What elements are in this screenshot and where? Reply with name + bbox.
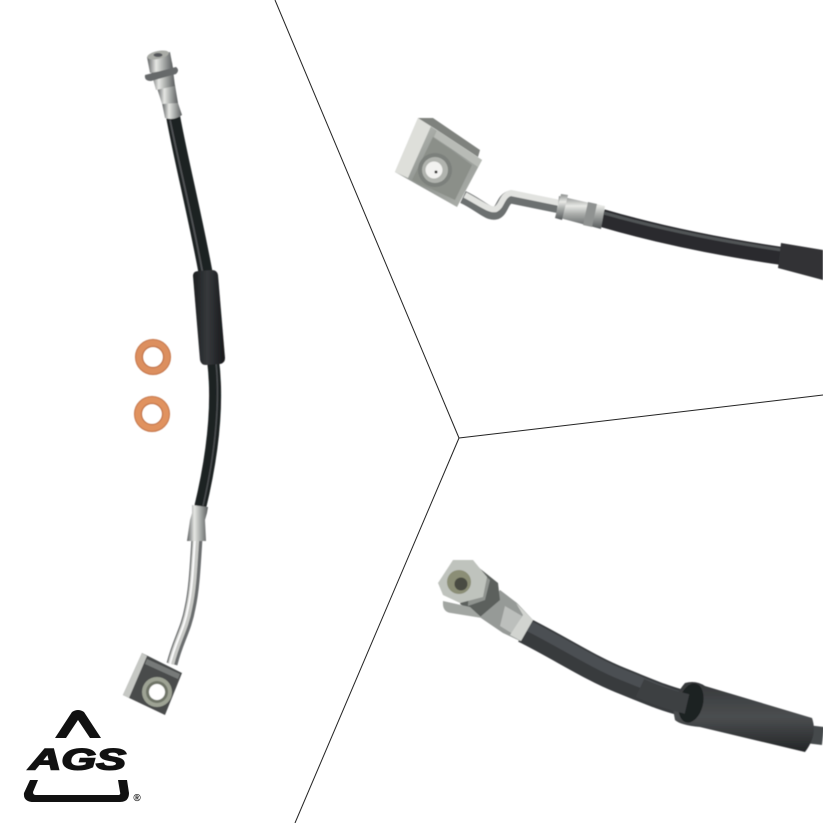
hose upper section [173,116,206,275]
washer upper [136,340,170,374]
registered mark: ® [133,793,141,804]
logo upper chevron [55,710,101,738]
sleeve [674,682,814,752]
hose [524,630,686,704]
copper washers [134,340,170,432]
protective sleeve [193,270,225,365]
bottom bracket [123,653,182,715]
logo lower bracket [24,780,129,802]
washer lower [134,396,170,432]
AGS logo [24,710,141,804]
detail: bracket end, upper right [395,118,823,280]
bottom crimp and metal tube [170,505,208,664]
metal tube [463,197,560,213]
divider lines [275,0,823,823]
full brake hose, left panel [123,49,225,715]
detail: banjo end and sleeve, lower right [438,560,823,752]
thin hose exit [806,734,823,736]
sleeve [778,243,823,280]
top banjo fitting [145,49,182,119]
hose lower section [200,360,215,508]
logo wordmark: AGS [28,744,126,776]
bracket plate [395,118,482,207]
crimp fitting [556,196,605,229]
hose [602,218,782,256]
banjo fitting [478,590,533,641]
